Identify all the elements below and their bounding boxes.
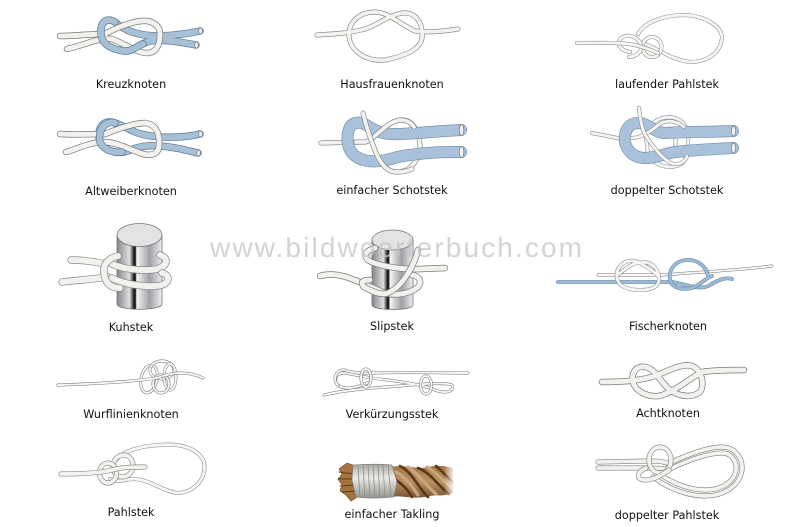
- label: einfacher Schotstek: [336, 184, 448, 197]
- panel: Altweiberknoten: [60, 122, 202, 198]
- panel: Hausfrauenknoten: [317, 12, 458, 91]
- panel: Wurflinienknoten: [58, 361, 203, 421]
- label: doppelter Pahlstek: [615, 509, 720, 522]
- label: Hausfrauenknoten: [340, 78, 444, 91]
- knot: Slipstek around cylinder: [320, 230, 445, 310]
- knot: doppelter Pahlstek: [598, 447, 742, 496]
- knot: laufender Pahlstek: [577, 15, 722, 62]
- knot: whipped rope end: [338, 462, 455, 501]
- label: Pahlstek: [108, 506, 155, 519]
- panel: Slipstek: [320, 230, 445, 333]
- label: einfacher Takling: [345, 508, 439, 521]
- label: Altweiberknoten: [85, 185, 177, 198]
- knot: Altweiberknoten: [60, 122, 202, 156]
- panel: laufender Pahlstek: [577, 15, 722, 91]
- panel: einfacher Schotstek: [321, 113, 464, 197]
- panel: Kuhstek: [62, 224, 168, 334]
- panel: Pahlstek: [61, 445, 204, 519]
- knot: Pahlstek: [61, 445, 204, 493]
- knot: Achtknoten: [602, 365, 744, 396]
- label: Wurflinienknoten: [83, 408, 179, 421]
- panel: Fischerknoten: [558, 260, 772, 333]
- panel: doppelter Schotstek: [592, 108, 736, 197]
- label: laufender Pahlstek: [615, 78, 720, 91]
- panel: einfacher Takling: [338, 462, 455, 521]
- panel: Achtknoten: [602, 365, 744, 420]
- label: doppelter Schotstek: [611, 184, 724, 197]
- knot: einfacher Schotstek: [321, 113, 464, 172]
- knot: Kuhstek around cylinder: [62, 224, 168, 309]
- watermark: www.bildwoerterbuch.com: [209, 232, 582, 263]
- label: Achtknoten: [636, 407, 700, 420]
- knot: Hausfrauenknoten: [317, 12, 458, 60]
- knot: doppelter Schotstek: [592, 108, 736, 167]
- label: Kreuzknoten: [96, 78, 166, 91]
- knot: Kreuzknoten: [60, 20, 202, 53]
- panel: Verkürzungsstek: [324, 369, 468, 421]
- knot: Fischerknoten: [558, 260, 772, 290]
- label: Slipstek: [370, 320, 415, 333]
- label: Fischerknoten: [629, 320, 707, 333]
- knot: Verkürzungsstek: [324, 369, 468, 395]
- label: Kuhstek: [109, 321, 154, 334]
- panel: Kreuzknoten: [60, 20, 202, 91]
- knot: Wurflinienknoten: [58, 361, 203, 394]
- panel: doppelter Pahlstek: [598, 447, 742, 522]
- label: Verkürzungsstek: [346, 408, 439, 421]
